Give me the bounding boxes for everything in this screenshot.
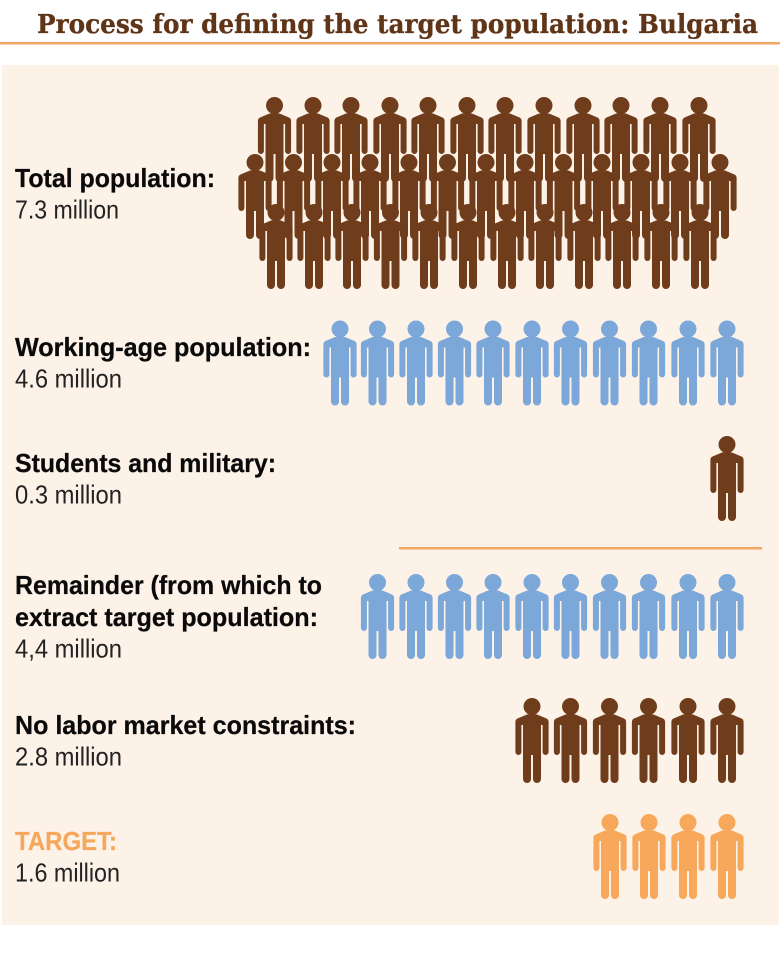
title underline [0, 42, 780, 44]
icons: total population crowd [238, 97, 737, 289]
label: total population: 7.3 million [15, 194, 119, 224]
label: no labor market constraints [15, 710, 356, 772]
label: target [15, 826, 120, 888]
icons: target [593, 814, 744, 899]
icons: working-age population [323, 320, 744, 406]
label: no labor market constraints: No labor market constraints: [15, 710, 356, 740]
label: working-age population: 4.6 million [15, 364, 122, 394]
label: students and military: 0.3 million [15, 480, 122, 510]
label: remainder [15, 570, 322, 664]
label: remainder: extract target population: [15, 602, 318, 632]
label: remainder: 4,4 million [15, 634, 122, 664]
title: Process for defining the target population: Bulgaria [37, 10, 758, 40]
label: target: 1.6 million [15, 858, 120, 888]
label: remainder: Remainder (from which to [15, 570, 322, 600]
label: students and military [15, 448, 276, 510]
label: total population: Total population: [15, 163, 215, 193]
label: total population [15, 163, 215, 224]
icons: no labor market constraints [515, 698, 744, 783]
label: working-age population [15, 332, 311, 394]
icons: remainder [361, 574, 744, 659]
divider [399, 547, 762, 550]
label: no labor market constraints: 2.8 million [15, 742, 122, 772]
label: target: TARGET: [15, 826, 117, 856]
label: students and military: Students and military: [15, 448, 276, 478]
label: working-age population: Working-age population: [15, 332, 311, 362]
icon: students and military [710, 436, 744, 521]
